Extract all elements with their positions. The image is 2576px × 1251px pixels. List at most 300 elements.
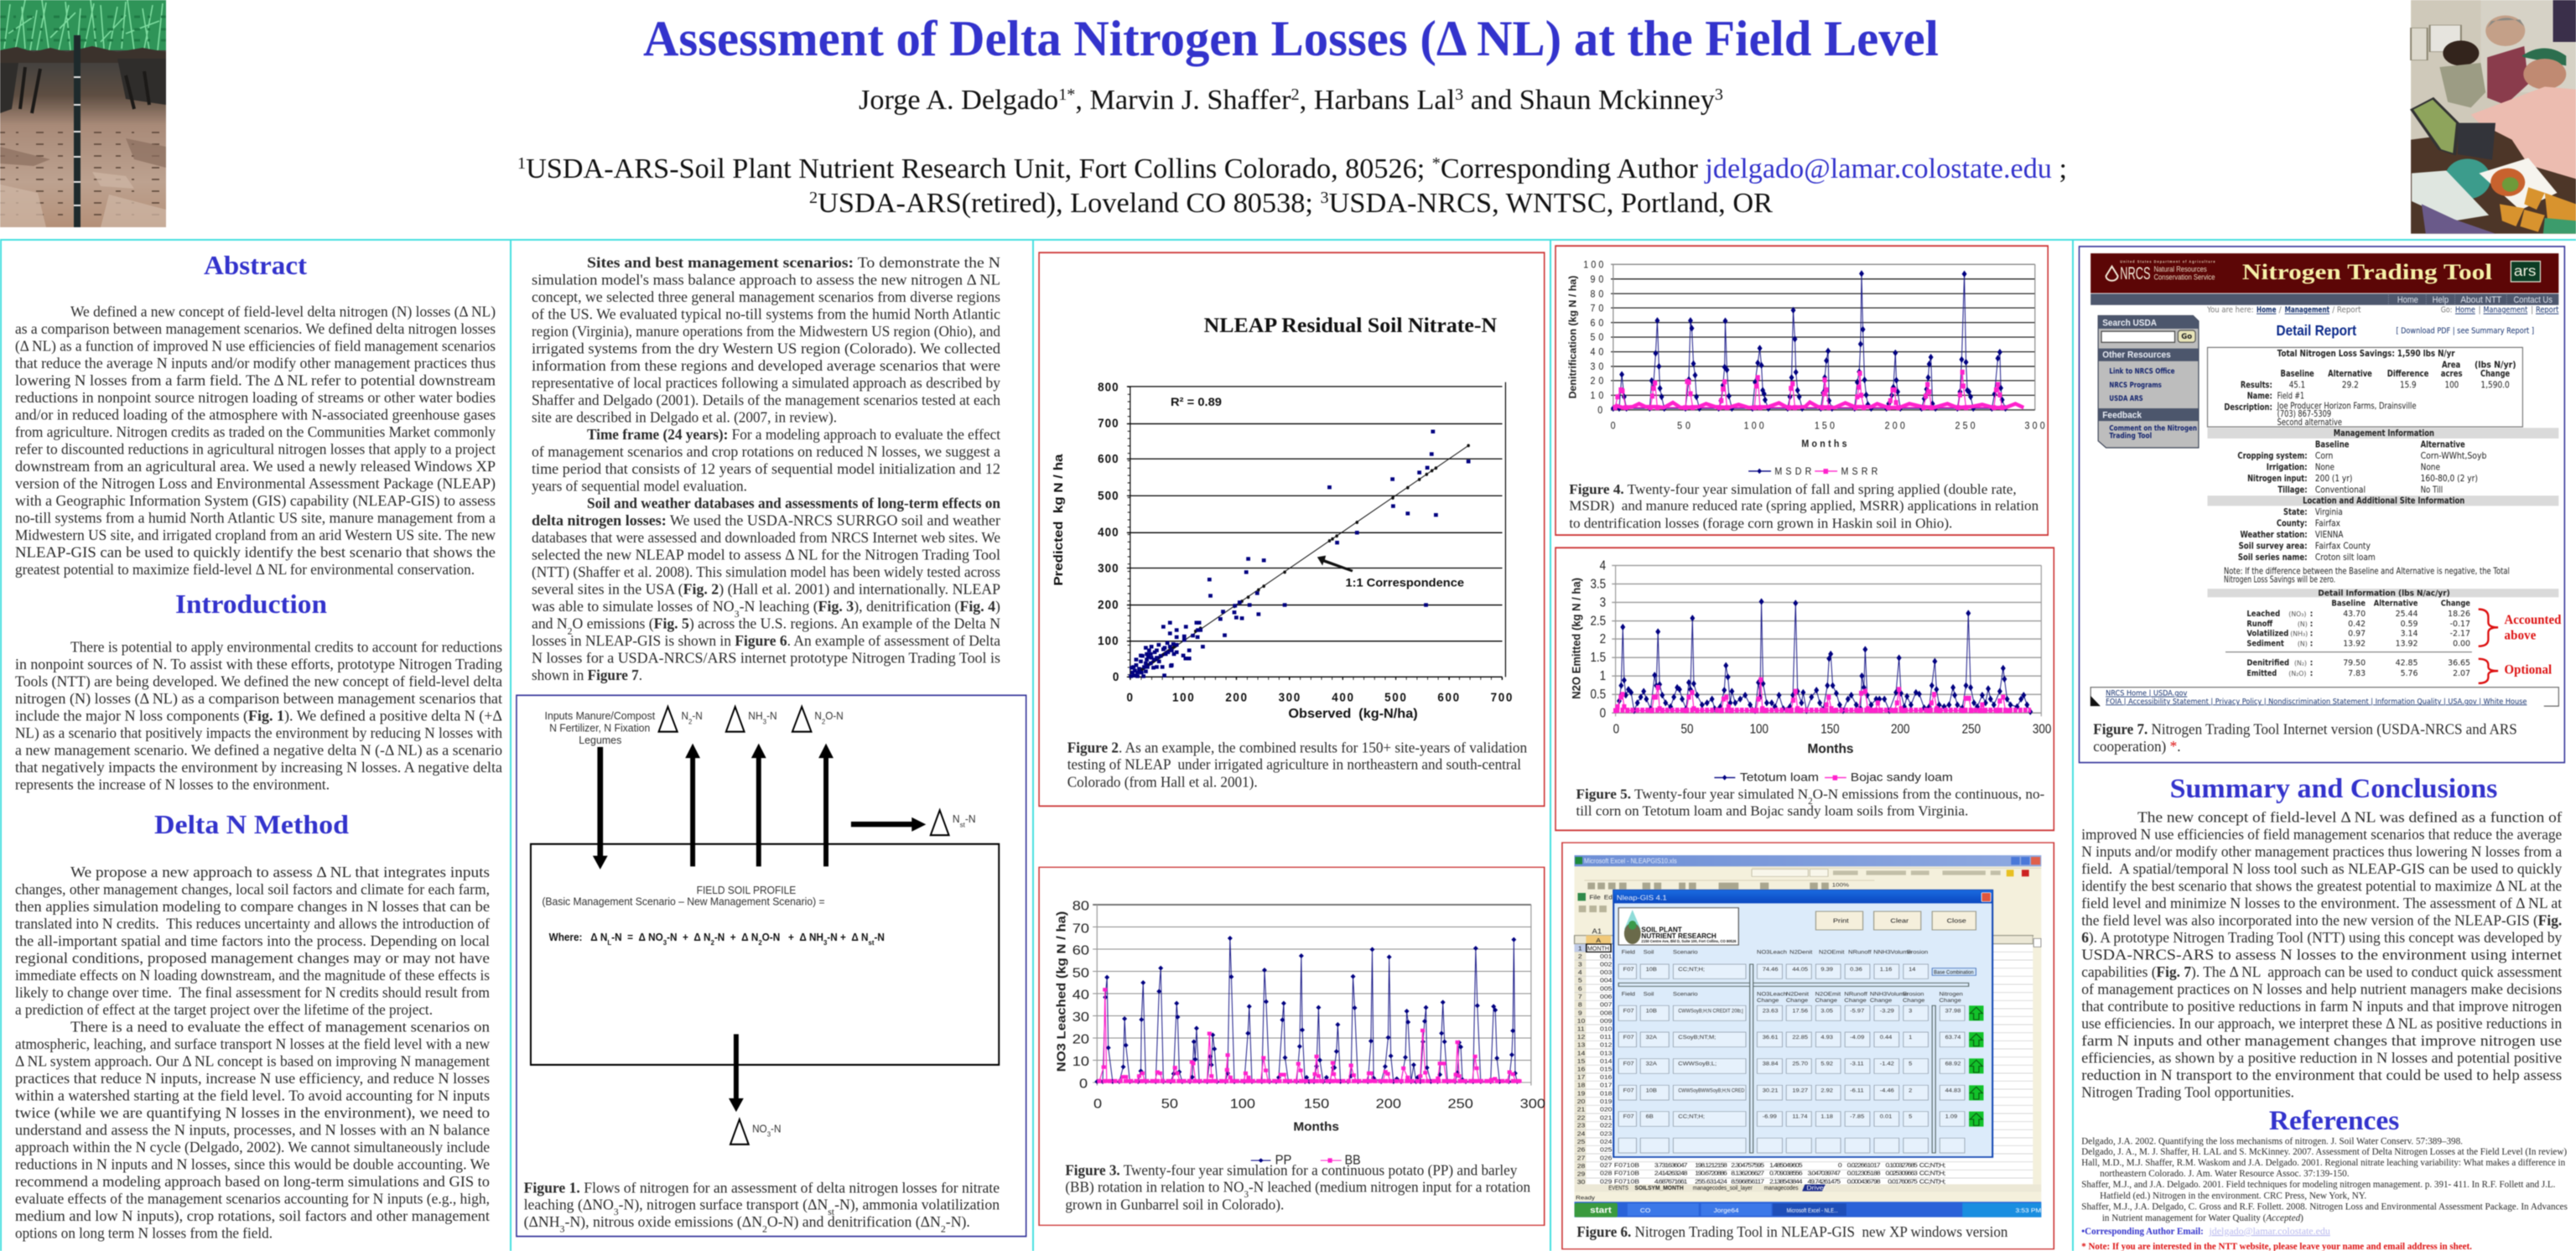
- text block: abstract: and/or in reduced loading of the atmosphere with N-associated greenhouse gases: [15, 407, 496, 423]
- detail information table: 7.83: [2348, 669, 2366, 678]
- text block: abstract: as a comparison between management scenarios. We defined delta nitrogen losses: [15, 320, 496, 337]
- detail information table: Sediment: [2246, 639, 2284, 648]
- heading: introduction: Introduction: [175, 589, 327, 619]
- banner: Nitrogen Trading Tool: [2242, 260, 2492, 284]
- dialog labels and values: N2OEmit: [1815, 992, 1841, 997]
- text block: abstract: refer to discounted reductions in agricultural nitrogen losses that apply to a project: [15, 441, 496, 458]
- arrows: gaseous losses up: [685, 744, 834, 866]
- excel rows: 3: [1578, 961, 1582, 968]
- logo: soil plant nutrient research: 2150 Centre Ave, Bld D, Suite 100, Fort Collins, CO 80526: [1641, 939, 1737, 944]
- breadcrumb: Management: [2484, 306, 2528, 315]
- excel window background: Ready: [1576, 1194, 1595, 1201]
- breadcrumb: Home: [2257, 306, 2276, 315]
- text block: delta n method: [15, 864, 490, 1241]
- axis labels: 300: [1520, 1097, 1545, 1111]
- breadcrumb: You are here:: [2206, 306, 2254, 315]
- text block: summary: USDA-NRCS-ARS to assess N losses to the environment using internet: [2081, 947, 2563, 963]
- axis labels: 700: [1491, 691, 1512, 705]
- text block: abstract: We defined a new concept of field-level delta nitrogen (N) losses (Δ NL): [70, 304, 496, 321]
- axis labels: 1: [1600, 669, 1606, 684]
- excel rows: 2.414263248: [1654, 1170, 1688, 1176]
- excel rows: 8.596856117: [1731, 1178, 1765, 1185]
- dialog labels and values: 14: [1909, 967, 1916, 973]
- dialog labels and values: -1.42: [1880, 1062, 1894, 1067]
- detail information table: (N): [2298, 620, 2308, 628]
- excel rows: 4: [1578, 969, 1582, 976]
- text block: sites, time frame and databases: Time frame (24 years): For a modeling approach to evaluate the effect: [587, 426, 1000, 444]
- text block: sites, time frame and databases: representative of local practices following a simulated approach as described by: [532, 374, 1000, 391]
- corresponding author email: •Corresponding Author Email:: [2081, 1225, 2204, 1237]
- detail information table: 42.85: [2396, 658, 2418, 668]
- detail information table: 5.76: [2401, 669, 2418, 678]
- corresponding author email: jdelgado@lamar.colostate.edu: [2208, 1225, 2330, 1237]
- caption: figure 1: Figure 1. Flows of nitrogen for an assessment of delta nitrogen losses for nitrate: [524, 1180, 1000, 1196]
- caption: figure 4: [1569, 482, 2038, 532]
- dialog labels and values: F07: [1623, 1088, 1634, 1093]
- diagram labels: N2O-N: [814, 710, 844, 725]
- text block: summary: reduction in N transport to the environment that could be used to help assess: [2081, 1067, 2562, 1083]
- excel rows: 4.687671661: [1654, 1178, 1688, 1185]
- dialog labels and values: [1622, 950, 1963, 1119]
- excel rows: 27: [1577, 1155, 1586, 1161]
- management information table: Nitrogen input:: [2247, 473, 2308, 484]
- location information table: Nitrogen Loss Savings will be zero.: [2224, 574, 2335, 584]
- management information table: No Till: [2421, 484, 2443, 496]
- gridlines and axes: [1611, 279, 2035, 395]
- breadcrumb: Report: [2536, 306, 2559, 315]
- excel rows: 020: [1600, 1106, 1613, 1113]
- dialog labels and values: 44.83: [1945, 1088, 1961, 1093]
- axis labels: 0: [1600, 706, 1606, 721]
- diagram labels: Where: Δ NL-N = Δ NO3-N + Δ N2-N + Δ N2O-N + Δ NH3-N + Δ Nst-N: [549, 932, 885, 947]
- caption: figure 3: grown in Gunbarrel soil in Colorado).: [1065, 1197, 1284, 1213]
- caption: figure 2: [1067, 740, 1528, 791]
- dialog labels and values: 22.85: [1792, 1035, 1808, 1041]
- text block: abstract: Midwestern US site, and irrigated cropland from an arid Western US site. The new: [15, 527, 496, 543]
- text block: references: in Nutrient management for Water Quality (Accepted): [2102, 1212, 2303, 1223]
- excel rows: 10B: [1627, 1178, 1639, 1185]
- detail information table: Detail Information (lbs N/ac/yr): [2318, 589, 2450, 599]
- excel rows: 8: [1578, 1001, 1582, 1008]
- excel rows: 26: [1577, 1146, 1586, 1153]
- excel rows: CC;NT;H;: [1919, 1162, 1945, 1169]
- caption: figure 2: Figure 2. As an example, the combined results for 150+ site-years of validation: [1067, 740, 1528, 756]
- dialog labels and values: 1.18: [1820, 1114, 1833, 1119]
- sidebar: Link to NRCS Office: [2109, 367, 2175, 376]
- sidebar: Comment on the Nitrogen: [2109, 424, 2197, 433]
- dialog input fields: [1618, 964, 1965, 1153]
- excel rows: 12: [1577, 1034, 1586, 1041]
- dialog labels and values: Change: [1844, 998, 1867, 1004]
- dialog labels and values: 68.92: [1945, 1062, 1961, 1067]
- excel rows: 25: [1577, 1139, 1586, 1145]
- excel rows: 022: [1600, 1122, 1613, 1129]
- diagram labels: Legumes: [579, 735, 621, 746]
- excel window background: File: [1589, 894, 1601, 901]
- dialog separators: [1618, 964, 1969, 1153]
- navigation bar: [2090, 293, 2558, 305]
- management information table: Conventional: [2315, 484, 2366, 496]
- banner: ars: [2514, 262, 2537, 279]
- dialog labels and values: 2: [1909, 1088, 1912, 1093]
- results table: (703) 867-5309: [2277, 408, 2331, 419]
- dialog labels and values: 1.16: [1880, 967, 1892, 973]
- management information table: Alternative: [2421, 439, 2465, 450]
- excel window background: SOILSYM_MONTH: [1635, 1185, 1684, 1191]
- axis labels: 100: [1583, 260, 1603, 271]
- excel rows: 016: [1600, 1074, 1613, 1081]
- dialog labels and values: 4.93: [1820, 1035, 1833, 1041]
- text block: delta n method: recommend a modeling approach based on long-term simulations and GIS to: [15, 1173, 490, 1190]
- text block: abstract: with a Geographic Information System (GIS) capability (NLEAP-GIS) to assess: [15, 492, 496, 510]
- gridlines and axes: [1093, 927, 1531, 1060]
- panel: figure 3 nitrate leached chart: Months: [1293, 1120, 1339, 1134]
- excel rows: 3.047039747: [1808, 1170, 1841, 1176]
- results table: 29.2: [2342, 379, 2359, 391]
- excel rows: 10B: [1627, 1170, 1639, 1176]
- logo: soil plant nutrient research: SOIL PLANT: [1641, 926, 1682, 934]
- report heading: [ Download PDF | see Summary Report ]: [2396, 326, 2534, 336]
- excel rows: 14: [1577, 1050, 1586, 1056]
- dialog labels and values: 10B: [1646, 1009, 1657, 1014]
- authors: Jorge A. Delgado1*, Marvin J. Shaffer2, Harbans Lal3 and Shaun Mckinney3: [859, 85, 1723, 116]
- axis labels: [1072, 899, 1545, 1111]
- sheet tabs and status: [1575, 1185, 2041, 1191]
- sidebar: NRCS Programs: [2109, 382, 2162, 390]
- sidebar: Trading Tool: [2109, 432, 2152, 441]
- banner: Natural Resources: [2154, 265, 2207, 273]
- corresponding author email: [2081, 1225, 2330, 1237]
- excel window background: Jorge64: [1714, 1207, 1739, 1214]
- management information table: Cropping system:: [2237, 450, 2308, 461]
- management information table: [2208, 428, 2558, 496]
- dialog labels and values: Change: [1870, 998, 1892, 1004]
- affiliations: 2USDA-ARS(retired), Loveland CO 80538; 3USDA-NRCS, WNTSC, Portland, OR: [809, 188, 1773, 219]
- axis labels: 4: [1600, 559, 1606, 574]
- dialog labels and values: Field: [1622, 992, 1635, 997]
- dialog labels and values: 0.36: [1850, 967, 1862, 973]
- logo: soil plant nutrient research: NUTRIENT RESEARCH: [1641, 932, 1716, 941]
- caption: figure 2: Colorado (from Hall et al. 2001).: [1067, 774, 1258, 791]
- series: Tetotum loam: [1619, 602, 2030, 712]
- legend: Bojac sandy loam: [1851, 771, 1953, 784]
- detail information table: [2208, 589, 2558, 678]
- text block: abstract: that reduce the average N inputs and/or modify other management practices thus: [15, 355, 496, 371]
- dialog labels and values: -4.09: [1850, 1035, 1864, 1041]
- excel rows: 006: [1600, 994, 1613, 1000]
- detail information table: 13.92: [2396, 639, 2418, 648]
- results table: Name:: [2247, 390, 2272, 402]
- axis labels: 10: [1591, 391, 1603, 402]
- dialog buttons: [1815, 911, 1976, 930]
- axis labels: 40: [1072, 988, 1089, 1002]
- results table: 100: [2444, 379, 2459, 391]
- sidebar: [2098, 315, 2199, 448]
- heading: summary and conclusions: Summary and Conclusions: [2170, 774, 2497, 804]
- axis labels: Months: [1801, 439, 1847, 449]
- heading: abstract: Abstract: [204, 250, 307, 280]
- text block: abstract: (Δ NL) as a function of improved N use efficiencies of field management scenarios: [15, 338, 496, 356]
- axis labels: 60: [1072, 943, 1089, 958]
- diagram labels: [542, 710, 976, 1138]
- text block: abstract: version of the Nitrogen Loss and Environmental Assessment Package (NLEAP): [15, 475, 496, 493]
- dialog labels and values: Change: [1940, 998, 1961, 1004]
- excel rows: 005: [1600, 985, 1613, 992]
- axis labels: Observed (kg-N/ha): [1288, 707, 1418, 721]
- location information table: Soil survey area:: [2239, 540, 2308, 551]
- detail information table: Denitrified: [2246, 658, 2289, 668]
- text block: delta n method: translated into N credits. This reduces uncertainty and allows the introduction of: [15, 916, 490, 932]
- axis labels: 90: [1591, 274, 1603, 285]
- results table: 45.1: [2289, 379, 2305, 391]
- breadcrumb: Home: [2455, 306, 2475, 315]
- dialog labels and values: -3.29: [1880, 1009, 1894, 1014]
- text block: sites, time frame and databases: losses in NLEAP-GIS is shown in Figure 6. An example of assessment of Delta: [532, 632, 1000, 649]
- location information table: Fairfax: [2315, 517, 2341, 529]
- dialog labels and values: 38.84: [1763, 1062, 1779, 1067]
- breadcrumb: |: [2531, 306, 2533, 315]
- diagram labels: NH3-N: [748, 710, 777, 725]
- excel rows: 0: [1838, 1162, 1842, 1169]
- dialog labels and values: Change: [1757, 998, 1779, 1004]
- excel rows: 003: [1600, 969, 1613, 976]
- detail information table: :: [2310, 620, 2313, 629]
- results table: Second alternative: [2277, 417, 2342, 428]
- dialog labels and values: N2Denit: [1789, 950, 1812, 955]
- dialog labels and values: Field: [1622, 950, 1635, 955]
- location information table: [2208, 495, 2558, 584]
- dialog labels and values: CC;NT;H;: [1678, 967, 1705, 973]
- axis labels: R² = 0.89: [1171, 395, 1222, 408]
- dialog labels and values: 63.74: [1945, 1035, 1961, 1041]
- banner: Conservation Service: [2154, 273, 2215, 282]
- dialog labels and values: 17.56: [1792, 1009, 1808, 1014]
- location information table: Soil series name:: [2238, 552, 2308, 563]
- axis labels: 150: [1304, 1097, 1329, 1111]
- dialog labels and values: NRunoff: [1844, 992, 1867, 997]
- management information table: Corn: [2315, 450, 2333, 461]
- text block: introduction: a new management scenario. We defined a negative delta N (-Δ NL) as a scenario: [15, 741, 502, 760]
- text block: introduction: NL) as a scenario that positively impacts the environment by reducing N losses with: [15, 724, 502, 742]
- axis labels: 300: [2025, 421, 2045, 432]
- axis labels: 300: [1098, 562, 1119, 576]
- axis labels: 3.5: [1590, 578, 1606, 592]
- excel rows: 21: [1577, 1106, 1586, 1113]
- text block: delta n method: then applies simulation modeling to compare changes in N losses that can be: [15, 898, 490, 915]
- axis labels: 50: [1681, 723, 1693, 737]
- dialog labels and values: 11.74: [1792, 1114, 1808, 1119]
- excel rows: 007: [1600, 1001, 1613, 1008]
- navigation bar: About NTT: [2460, 295, 2502, 305]
- text block: sites, time frame and databases: [532, 254, 1000, 683]
- excel window background: A1: [1592, 927, 1602, 935]
- dialog labels and values: 32A: [1646, 1035, 1657, 1041]
- dialog labels and values: -6.11: [1850, 1088, 1864, 1093]
- excel rows: 029 F07: [1600, 1178, 1627, 1185]
- text block: introduction: [15, 639, 502, 793]
- management information table: None: [2421, 461, 2440, 473]
- management information table: 200 (1 yr): [2315, 473, 2352, 484]
- heading: delta n method: Delta N Method: [154, 809, 349, 839]
- callout: accounted above and optional braces: above: [2505, 628, 2537, 643]
- dialog labels and values: Soil: [1644, 992, 1654, 997]
- excel rows: 23: [1577, 1122, 1586, 1129]
- text block: introduction: represents the increase of N losses to the environment.: [15, 776, 330, 793]
- banner: [2090, 253, 2558, 293]
- excel window background: Edit: [1604, 894, 1617, 901]
- dialog labels and values: -5.97: [1850, 1009, 1864, 1014]
- series: Bojac sandy loam: [1616, 705, 2031, 716]
- text block: sites, time frame and databases: delta nitrogen losses: We used the USDA-NRCS SURRGO soil and weather: [532, 511, 1000, 528]
- results table: Difference: [2387, 368, 2428, 379]
- text block: abstract: [15, 304, 496, 578]
- excel rows: 8.136206627: [1731, 1170, 1765, 1176]
- diagram labels: Nst-N: [953, 813, 976, 828]
- axis labels: 200: [1885, 421, 1905, 432]
- caption: figure 5: [1576, 787, 2044, 819]
- detail information table: 18.26: [2448, 610, 2470, 619]
- sidebar: Search USDA: [2102, 318, 2157, 329]
- green up arrows: [1969, 1005, 1984, 1127]
- axis labels: 30: [1072, 1010, 1089, 1025]
- location information table: Croton silt loam: [2315, 552, 2376, 563]
- title: Assessment of Delta Nitrogen Losses (Δ NL) at the Field Level: [643, 11, 1939, 66]
- excel window background: EVENTS: [1608, 1185, 1628, 1191]
- excel window background: Microsoft Excel - NLEAPGIS10.xls: [1584, 857, 1677, 864]
- dialog labels and values: CC;NT;H;: [1678, 1114, 1705, 1119]
- arrow: 1:1 correspondence callout: [1317, 556, 1353, 572]
- excel rows: 5: [1578, 977, 1582, 984]
- caption: figure 4: Figure 4. Twenty-four year simulation of fall and spring applied (double rate,: [1569, 482, 2017, 497]
- affiliations: [517, 153, 2067, 219]
- excel rows: 026: [1600, 1155, 1613, 1161]
- panel: figure 4 denitrification chart: [1555, 246, 2048, 535]
- dialog labels and values: Soil: [1644, 950, 1654, 955]
- detail information table: 25.44: [2396, 610, 2418, 619]
- axis labels: 200: [1098, 598, 1119, 612]
- management information table: None: [2315, 461, 2334, 473]
- excel rows: 17: [1577, 1074, 1586, 1081]
- results table: 15.9: [2400, 379, 2417, 391]
- text block: sites, time frame and databases: time period that consists of 12 years of sequential model initialization and 12: [532, 460, 1000, 477]
- axis labels: 100: [1172, 691, 1194, 705]
- text block: introduction: Tools (NTT) are being developed. We defined the new concept of field-level delta: [15, 672, 502, 691]
- chart title: NLEAP Residual Soil Nitrate-N: [1204, 314, 1498, 337]
- excel window background: managecodes_soil_layer: [1693, 1185, 1753, 1191]
- caption: figure 4: to dentrification losses (forage corn grown in Haskin soil in Ohio).: [1569, 516, 1952, 532]
- dialog labels and values: NNH3Volume: [1873, 950, 1912, 955]
- excel rows: 10: [1577, 1018, 1586, 1025]
- dialog labels and values: 23.63: [1763, 1009, 1779, 1014]
- excel rows: 7: [1578, 994, 1582, 1000]
- excel rows: 0.000436798: [1847, 1178, 1881, 1185]
- dialog labels and values: F07: [1623, 1114, 1634, 1119]
- detail information table: (NO₃): [2288, 610, 2306, 618]
- excel rows: 004: [1600, 977, 1613, 984]
- text block: delta n method: immediate effects on N loading downstream, and the magnitude of these effects is: [15, 967, 490, 984]
- detail information table: 13.92: [2343, 639, 2366, 648]
- excel rows: 1: [1578, 945, 1582, 952]
- detail information table: 79.50: [2343, 658, 2366, 668]
- excel rows: 1.485049605: [1769, 1162, 1803, 1169]
- axis labels: 200: [1225, 691, 1247, 705]
- location information table: Virginia: [2315, 506, 2343, 517]
- navigation bar: Contact Us: [2513, 295, 2553, 305]
- axis labels: [1052, 381, 1512, 721]
- sidebar: Other Resources: [2102, 350, 2171, 361]
- photo: people reviewing maps on a laptop: [2411, 0, 2576, 234]
- text block: delta n method: the all-important spatial and time factors into the process. Depending on local: [15, 932, 490, 949]
- axis labels: 30: [1591, 361, 1603, 372]
- axis labels: Denitrification (kg N / ha): [1566, 276, 1578, 399]
- diagram labels: Inputs Manure/Compost: [545, 710, 656, 722]
- axis labels: 600: [1437, 691, 1459, 705]
- axis labels: 50: [1161, 1097, 1178, 1111]
- axis labels: 50: [1591, 333, 1603, 343]
- axis labels: [1571, 559, 2051, 756]
- navigation bar: Home: [2397, 295, 2418, 305]
- text block: introduction: in nonpoint sources of N. To assist with these efforts, prototype Nitrogen Trading: [15, 656, 502, 672]
- excel rows: 6: [1578, 985, 1582, 992]
- excel rows: 49.74261475: [1808, 1178, 1841, 1185]
- axis labels: 40: [1591, 347, 1603, 358]
- dialog labels and values: 5: [1909, 1062, 1912, 1067]
- axis labels: 100: [1098, 634, 1119, 648]
- detail information table: 0.59: [2401, 620, 2418, 629]
- page footer links: FOIA | Accessibility Statement | Privacy Policy | Nondiscrimination Statement | Information Quality | USA.gov | White House: [2106, 697, 2527, 705]
- excel rows: 9: [1578, 1010, 1582, 1016]
- text block: sites, time frame and databases: Shaffer and Delgado (2001). Details of the management scenarios tested at each: [532, 392, 1000, 409]
- series: BB: [1097, 1075, 1520, 1087]
- excel rows: 0.709038556: [1769, 1170, 1803, 1176]
- text block: summary: The new concept of field-level Δ NL was defined as a function of: [2137, 809, 2563, 825]
- dialog labels and values: 32A: [1646, 1062, 1657, 1067]
- dialog labels and values: 1.09: [1945, 1114, 1957, 1119]
- text block: abstract: NLEAP-GIS can be used to quickly identify the best scenario that shows the: [15, 544, 496, 561]
- excel rows: 015: [1600, 1066, 1613, 1072]
- text block: delta n method: evaluate effects of the management scenarios accounting for N inputs (e.g., high,: [15, 1191, 490, 1207]
- axis labels: 800: [1098, 381, 1119, 395]
- text block: summary: Nitrogen Trading Tool opportunities.: [2081, 1084, 2294, 1101]
- NLEAP-GIS dialog window: [1613, 890, 1992, 1157]
- text block: delta n method: Δ NL system approach. Our Δ NL concept is based on improving N management: [15, 1053, 490, 1070]
- excel rows: 001: [1600, 953, 1613, 960]
- axis labels: N2O Emitted (kg N / ha): [1571, 578, 1583, 699]
- diagram labels: N Fertilizer, N Fixation: [549, 722, 650, 735]
- text block: sites, time frame and databases: was able to simulate losses of NO3-N leaching (Fig. 3), denitrification (Fig. 4): [532, 598, 1000, 620]
- caption: figure 2: testing of NLEAP under irrigated agriculture in northeastern and south-central: [1067, 756, 1521, 773]
- dialog labels and values: Change: [1786, 998, 1808, 1004]
- location information table: Note: If the difference between the Baseline and Alternative is negative, the Total: [2224, 565, 2510, 577]
- text block: sites, time frame and databases: irrigated systems from the dry Western US region (Colorado). We collected: [532, 340, 1000, 357]
- text block: delta n method: approach within the N cycle (Delgado, 2002). We cannot simultaneously include: [15, 1139, 490, 1156]
- text block: references: Delgado, J.A. 2002. Quantifying the loss mechanisms of nitrogen. J. Soil Water Conserv. 57:389–398.: [2081, 1135, 2463, 1146]
- excel rows: 028 F07: [1600, 1170, 1627, 1176]
- axis labels: 20: [1591, 376, 1603, 387]
- excel rows: MONTH: [1587, 945, 1609, 952]
- callout: accounted above and optional braces: Optional: [2505, 662, 2552, 677]
- excel window background: managecodes: [1764, 1185, 1798, 1191]
- excel rows: 0.01760675: [1888, 1178, 1918, 1185]
- results table: Alternative: [2328, 368, 2372, 379]
- detail information table: (N₂O): [2288, 670, 2306, 677]
- text block: sites, time frame and databases: several sites in the USA (Fig. 2) (Hall et al. 2001) and internationally. NLEAP: [532, 580, 1000, 599]
- axis labels: 0: [1113, 671, 1119, 684]
- dialog labels and values: Change: [1815, 998, 1837, 1004]
- dialog labels and values: 10B: [1646, 967, 1657, 973]
- excel rows: 2.138543844: [1769, 1178, 1803, 1185]
- breadcrumb: Management: [2285, 306, 2330, 315]
